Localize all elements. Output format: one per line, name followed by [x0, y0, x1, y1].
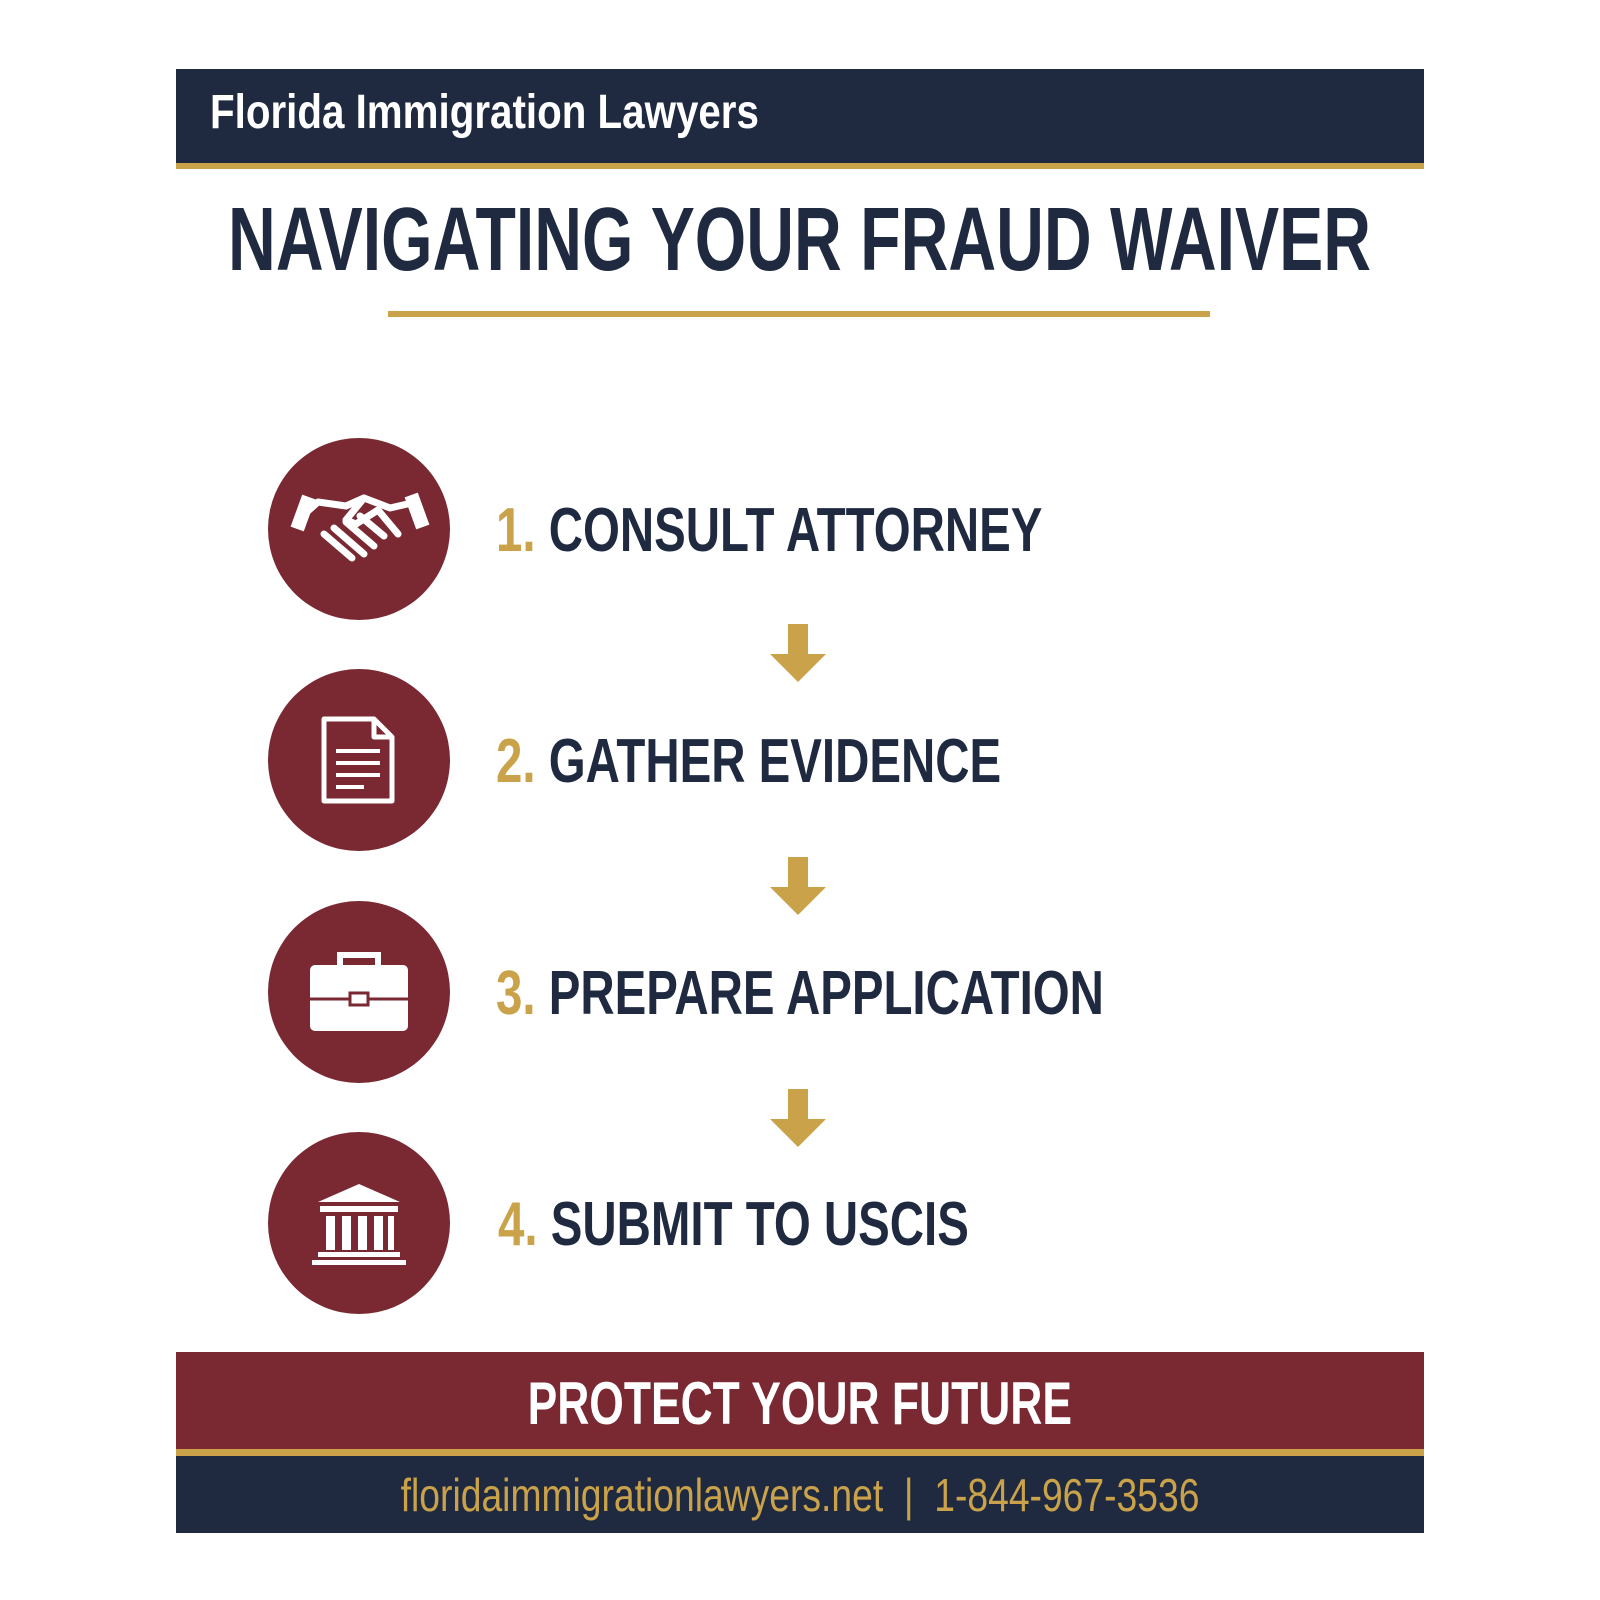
step 2: [268, 669, 1001, 851]
icon: government building: [268, 1132, 450, 1314]
contact bar: [176, 1456, 1424, 1533]
footer banner: [176, 1352, 1424, 1456]
icon: handshake: [268, 438, 450, 620]
arrow 3: [770, 1089, 826, 1147]
step 3 label: 3. PREPARE APPLICATION: [496, 959, 1104, 1028]
icon: document: [268, 669, 450, 851]
title: NAVIGATING YOUR FRAUD WAIVER: [229, 190, 1371, 290]
arrow 2: [770, 857, 826, 915]
step 2 label: 2. GATHER EVIDENCE: [496, 727, 1001, 796]
step 1: [268, 438, 1042, 620]
header text: Florida Immigration Lawyers: [210, 86, 759, 139]
arrow 1: [770, 624, 826, 682]
contact text: floridaimmigrationlawyers.net | 1-844-967-3536: [401, 1469, 1199, 1521]
header bar: [176, 69, 1424, 169]
step 3: [268, 901, 1104, 1083]
footer headline: PROTECT YOUR FUTURE: [528, 1370, 1072, 1437]
step 1 label: 1. CONSULT ATTORNEY: [496, 496, 1042, 565]
step 4: [268, 1132, 969, 1314]
icon: briefcase: [268, 901, 450, 1083]
step 4 label: 4. SUBMIT TO USCIS: [498, 1190, 969, 1259]
title underline: [388, 311, 1210, 317]
